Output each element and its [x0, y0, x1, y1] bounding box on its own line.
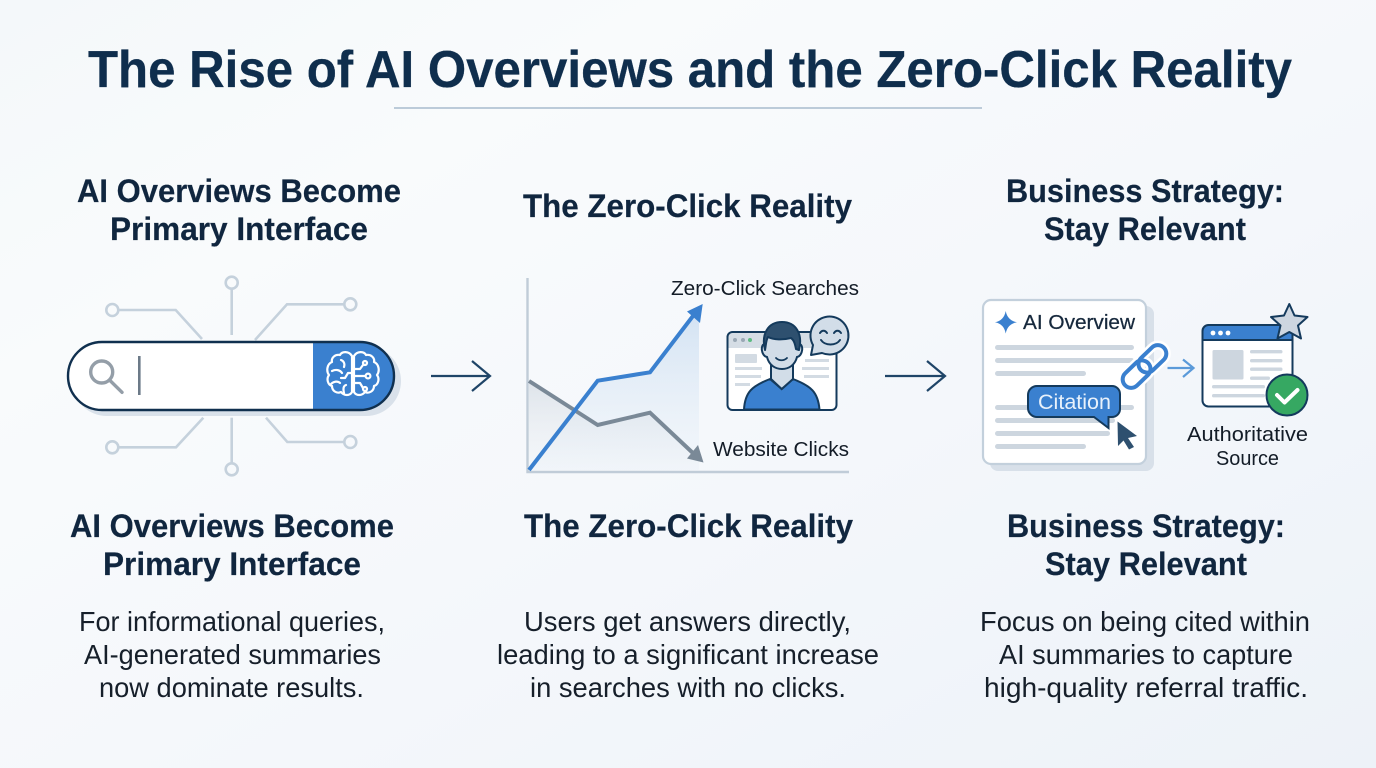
text: strategy description: AI summaries to capture	[999, 639, 1293, 670]
line: website clicks	[529, 381, 704, 462]
label: AI overview: AI Overview	[1023, 311, 1135, 334]
text: zero-click description: in searches with no clicks.	[530, 672, 846, 703]
heading: zero-click top: The Zero-Click Reality	[523, 188, 852, 224]
text: strategy description	[980, 606, 1310, 703]
heading: strategy top: Business Strategy:	[1006, 173, 1284, 209]
heading: AI overviews lower: Primary Interface	[103, 546, 361, 582]
icon: sparkle	[995, 311, 1017, 334]
panel: zero-click	[497, 188, 879, 703]
label: zero-click searches: Zero-Click Searches	[671, 277, 859, 300]
title: The Rise of AI Overviews and the Zero-Click Reality	[88, 41, 1292, 99]
text: zero-click description: Users get answers directly,	[524, 606, 851, 637]
label: website clicks: Website Clicks	[713, 438, 849, 461]
icon: chain link	[1119, 342, 1170, 391]
line: zero-click searches	[529, 304, 703, 470]
icon: smile bubble	[810, 317, 848, 355]
heading: AI overviews top: AI Overviews Become	[77, 173, 401, 209]
heading: strategy lower: Stay Relevant	[1045, 546, 1247, 582]
heading: strategy lower: Business Strategy:	[1007, 508, 1285, 544]
icon: user at browser	[728, 317, 848, 410]
icon: check badge	[1266, 374, 1308, 416]
callout: citation	[1028, 386, 1120, 428]
heading: strategy top: Stay Relevant	[1044, 211, 1246, 247]
line chart	[528, 277, 859, 472]
icon: neural connector lines	[106, 277, 356, 475]
label: authoritative source: Authoritative	[1187, 423, 1308, 446]
arrow: link to source	[1168, 360, 1194, 377]
heading: strategy lower	[1007, 508, 1285, 582]
text: strategy description: Focus on being cited within	[980, 606, 1310, 637]
heading: AI overviews lower: AI Overviews Become	[70, 508, 394, 544]
panel: AI overviews	[68, 173, 401, 703]
text: AI overviews description: AI-generated summaries	[84, 639, 381, 670]
heading: strategy top	[1006, 173, 1284, 247]
text: AI overviews description	[79, 606, 385, 703]
text: strategy description: high-quality referral traffic.	[984, 672, 1308, 703]
icon: search bar	[68, 342, 401, 416]
text: zero-click description: leading to a significant increase	[497, 639, 879, 670]
icon: brain	[327, 352, 379, 395]
icon: AI overview document	[983, 300, 1154, 471]
label: authoritative source	[1187, 423, 1308, 470]
icon: source browser	[1202, 304, 1308, 416]
text: zero-click description	[497, 606, 879, 703]
heading: zero-click lower: The Zero-Click Reality	[524, 508, 853, 544]
text: AI overviews description: For informational queries,	[79, 606, 385, 637]
heading: AI overviews top: Primary Interface	[110, 211, 368, 247]
icon: magnifier	[91, 361, 122, 392]
label: authoritative source: Source	[1216, 447, 1279, 470]
callout: citation: Citation	[1038, 391, 1111, 414]
text: AI overviews description: now dominate results.	[99, 672, 364, 703]
arrow: second to third	[885, 361, 945, 391]
heading: AI overviews top	[77, 173, 401, 247]
heading: AI overviews lower	[70, 508, 394, 582]
icon: cursor	[1118, 422, 1137, 450]
icon: star	[1271, 304, 1308, 338]
arrow: first to second	[431, 361, 490, 391]
panel: business strategy	[980, 173, 1310, 703]
